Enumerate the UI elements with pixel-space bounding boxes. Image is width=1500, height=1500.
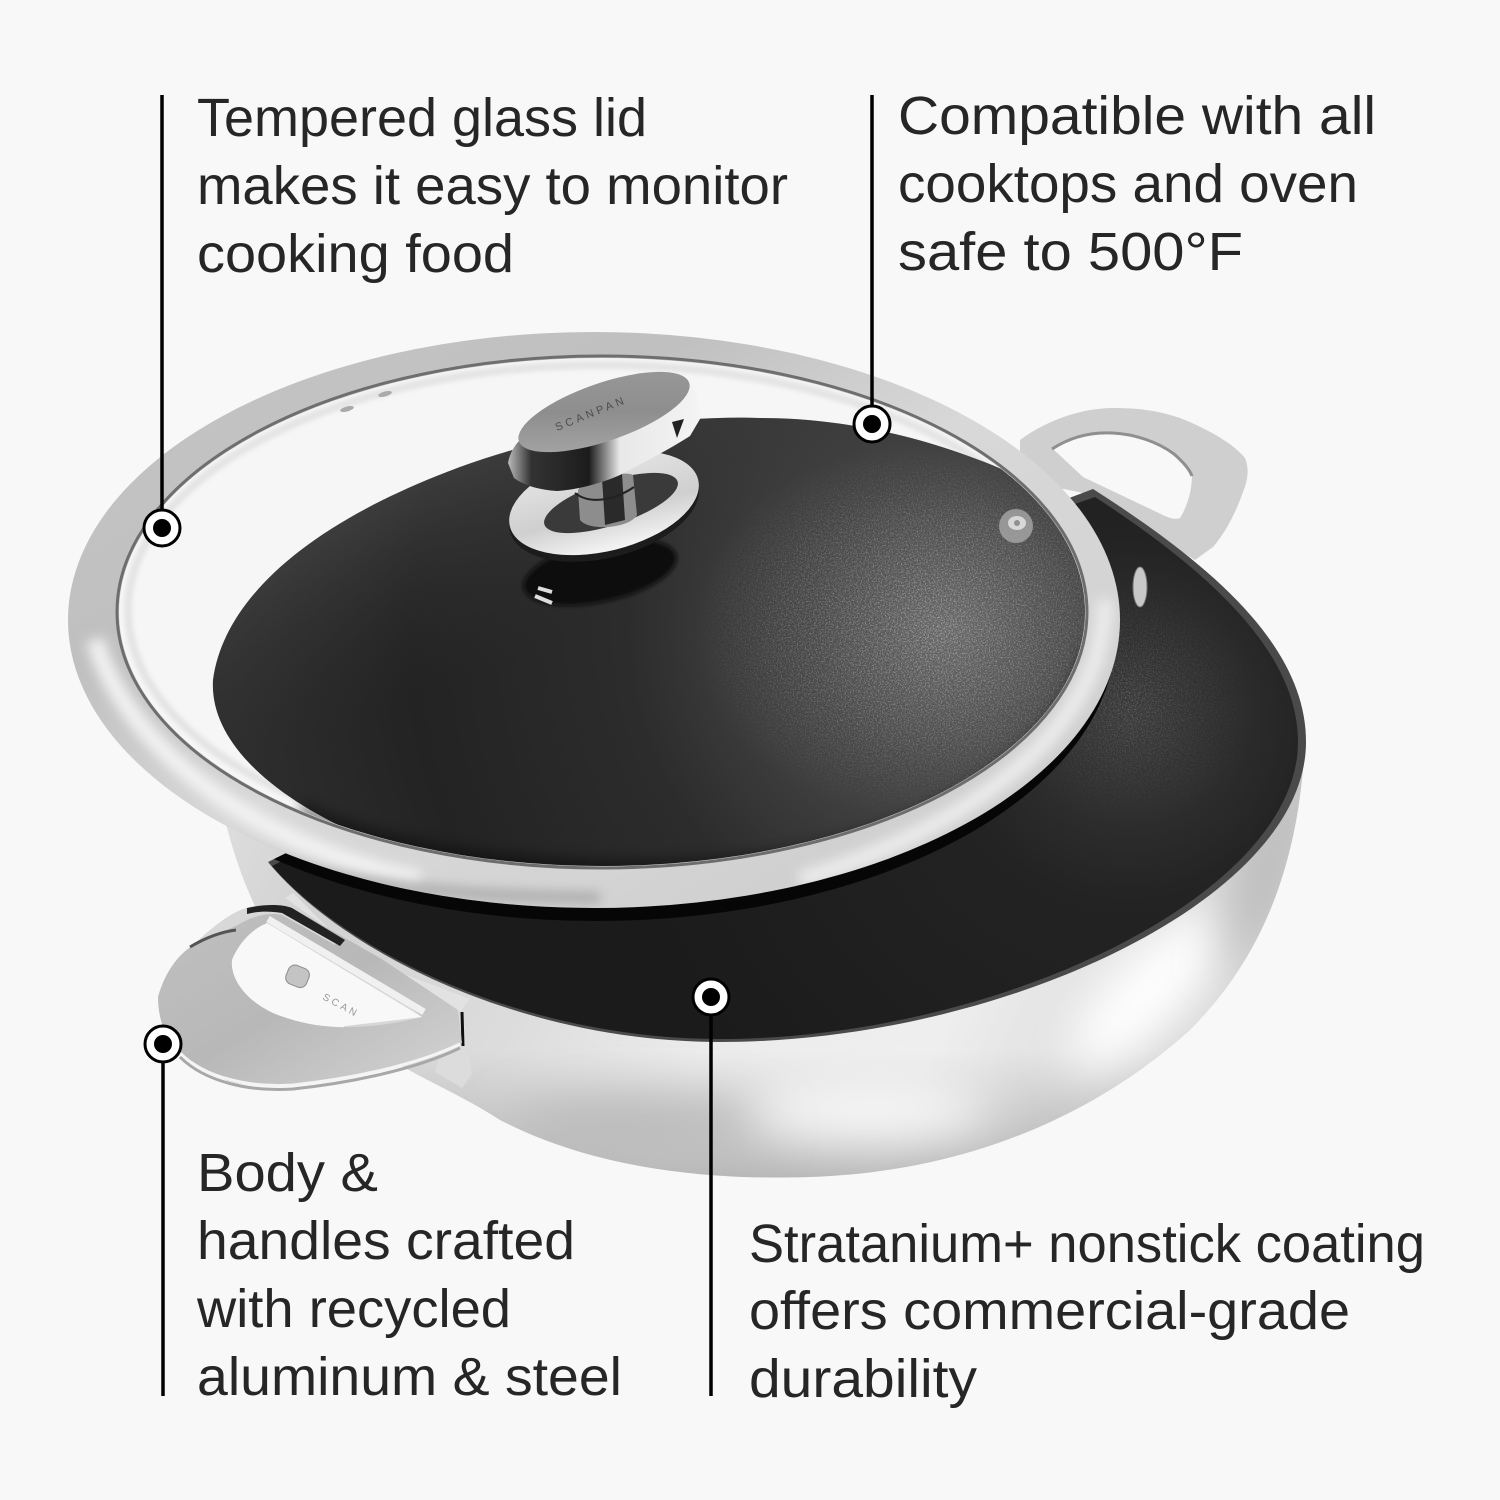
lid inner rim line (117, 356, 1087, 868)
steam vent holes on rim (340, 390, 392, 413)
glass vent bump (999, 509, 1033, 543)
front pan handle (158, 893, 472, 1090)
lid knob (498, 355, 710, 618)
glass lid (68, 332, 1120, 908)
text: nonstick coating: offers commercial-grade (749, 1281, 1350, 1341)
lid shadow band (274, 673, 1111, 921)
leader line: glass lid (160, 95, 164, 512)
text: nonstick coating: durability (749, 1349, 977, 1409)
text: cooktops: cooktops and oven (898, 154, 1358, 214)
leader line: materials (161, 1060, 165, 1396)
knob cap side (508, 383, 701, 491)
rear pan handle (1020, 408, 1248, 560)
handle top band (192, 905, 340, 946)
callout: glass lid (144, 88, 788, 546)
callout: cooktops (854, 86, 1376, 442)
knob base disc (498, 436, 710, 580)
lid steel ring (68, 332, 1120, 908)
text: cooktops: Compatible with all (898, 86, 1376, 146)
handle bracket (435, 1010, 472, 1088)
text: materials: Body & (197, 1143, 378, 1203)
handle peg (284, 963, 311, 990)
text: cooktops: safe to 500°F (898, 222, 1243, 282)
callout: nonstick coating (693, 979, 1425, 1409)
knob reflection (517, 526, 683, 618)
text: glass lid: Tempered glass lid (197, 88, 647, 148)
pan interior nonstick coating (268, 489, 1306, 1042)
text: materials: with recycled (196, 1279, 511, 1339)
marker: nonstick coating (693, 979, 729, 1015)
text: materials: handles crafted (197, 1211, 575, 1271)
text: nonstick coating: Stratanium+ nonstick coating (749, 1214, 1425, 1274)
text: glass lid: cooking food (197, 224, 514, 284)
rivet on rear wall (1133, 567, 1147, 607)
glass pane (119, 358, 1085, 866)
dark interior seen through glass (212, 418, 1085, 866)
rear handle inner highlight (1052, 433, 1192, 476)
text: glass lid: makes it easy to monitor (197, 156, 788, 216)
marker: glass lid (144, 510, 180, 546)
text: materials (196, 1143, 622, 1407)
marker: materials (145, 1026, 181, 1062)
text: glass lid (197, 88, 788, 284)
brand on knob: SCANPAN (554, 394, 629, 434)
product photo: covered pan (68, 332, 1328, 1178)
knob stem (578, 474, 637, 527)
knob cap face (509, 355, 699, 469)
handle opening (232, 923, 422, 1027)
text: nonstick coating (749, 1214, 1425, 1409)
callout: materials (145, 1026, 622, 1407)
brand on pan wall: SCAN (321, 992, 361, 1020)
marker: cooktops (854, 406, 890, 442)
infographic canvas (68, 95, 1422, 1408)
handle metal (158, 905, 462, 1086)
handle mounting strip (285, 893, 470, 1012)
text: materials: aluminum & steel (197, 1347, 622, 1407)
leader line: cooktops (870, 95, 874, 410)
text: cooktops (898, 86, 1376, 282)
pan body (226, 770, 1303, 1178)
leader line: nonstick coating (709, 1012, 713, 1396)
